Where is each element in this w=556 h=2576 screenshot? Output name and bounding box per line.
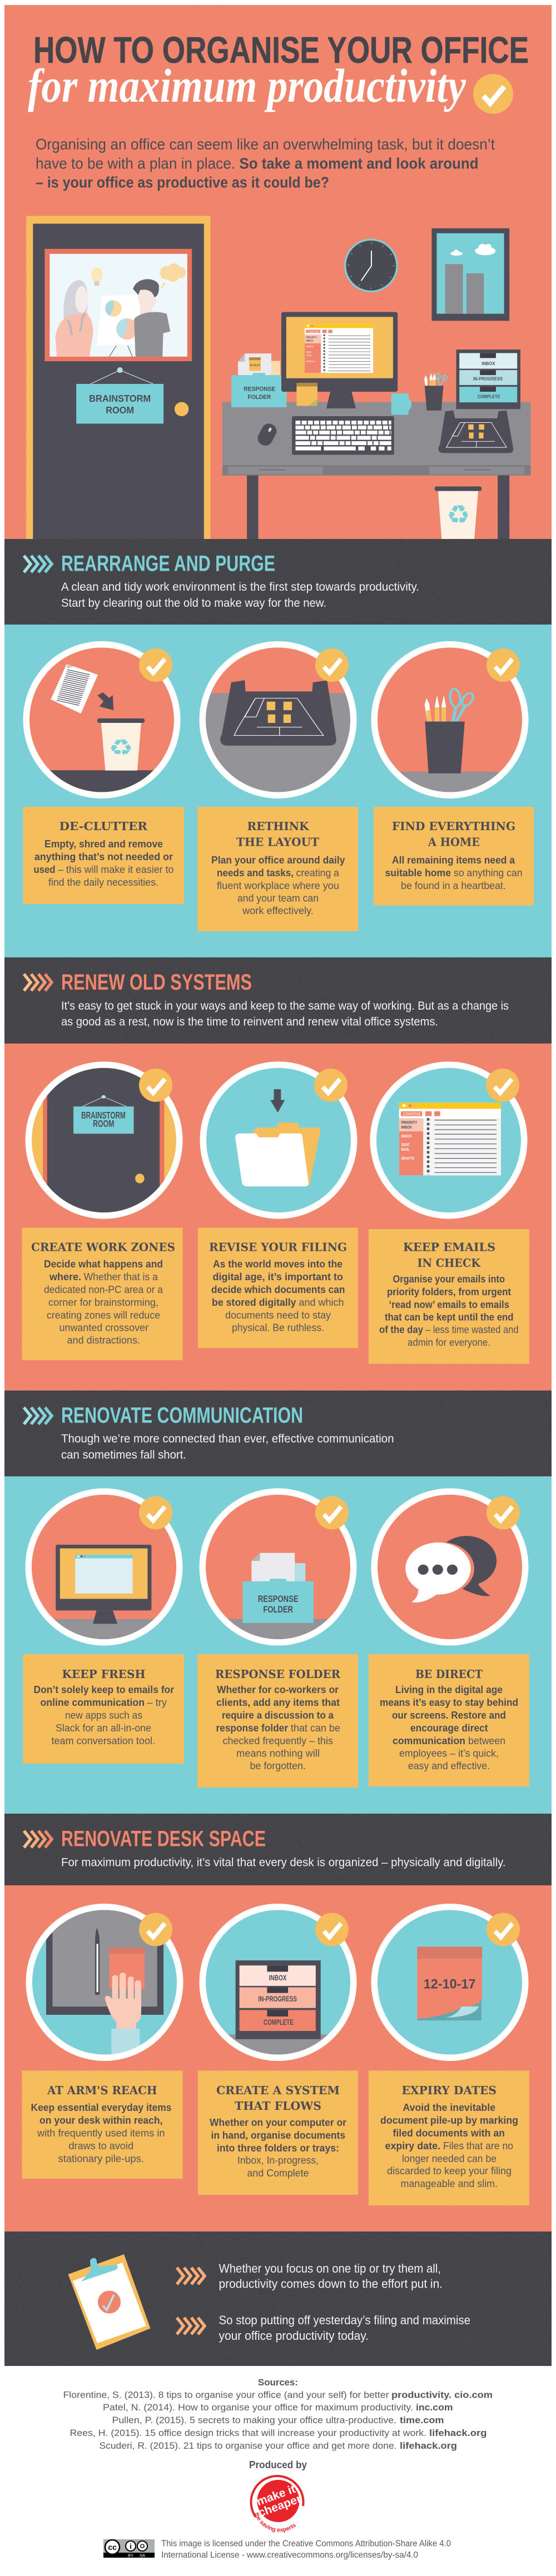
section header: renovate desk space bbox=[4, 1814, 552, 1885]
card: expiry dates: manageable and slim. bbox=[400, 2178, 498, 2189]
card: create a system that flows: into three folders or trays: bbox=[217, 2142, 339, 2154]
card: response folder: that can be bbox=[291, 1722, 340, 1734]
icon: expiry date note bbox=[365, 1902, 535, 2061]
card: be direct: encourage direct bbox=[410, 1722, 488, 1734]
card: response folder: checked frequently – this bbox=[222, 1735, 333, 1746]
closing text one: productivity comes down to the effort put in. bbox=[219, 2277, 443, 2290]
card: at arm's reach: draws to avoid bbox=[69, 2140, 133, 2151]
document trays: COMPLETE bbox=[478, 393, 500, 399]
icon: document trays bbox=[199, 1904, 357, 2061]
closing text two: So stop putting off yesterday’s filing and maximise bbox=[219, 2313, 470, 2327]
icon: work zone door: BRAINSTORM bbox=[81, 1110, 126, 1121]
card: keep emails in check: IN CHECK bbox=[417, 1256, 481, 1270]
card: create work zones: Decide what happens and bbox=[44, 1258, 163, 1270]
card: keep emails in check bbox=[369, 1229, 529, 1364]
icon: title check badge bbox=[473, 74, 513, 114]
blueprint bbox=[438, 411, 513, 453]
panel: hero bbox=[4, 5, 552, 539]
sources: Sources: bbox=[258, 2377, 298, 2388]
icon: work zone door: ROOM bbox=[93, 1119, 114, 1129]
card: create work zones bbox=[22, 1228, 182, 1360]
icon: pencil pot bbox=[371, 641, 528, 798]
card: find everything a home: so anything can bbox=[454, 867, 523, 878]
logo: make it cheaper: the saving experts bbox=[255, 2512, 296, 2533]
computer mouse bbox=[255, 421, 279, 448]
card: expiry dates: Avoid the inevitable bbox=[403, 2101, 495, 2113]
card: be direct: means it’s easy to stay behind bbox=[380, 1696, 518, 1708]
icon: clipboard bbox=[68, 2254, 150, 2350]
card: be direct: our screens. Restore and bbox=[392, 1709, 506, 1721]
keyboard bbox=[292, 416, 394, 455]
card: create work zones: dedicated non-PC area or a bbox=[44, 1284, 163, 1295]
intro text: – is your office as productive as it could be? bbox=[36, 173, 329, 191]
intro: It’s easy to get stuck in your ways and keep to the same way of working. But as a change is bbox=[61, 999, 509, 1012]
card: revise your filing: documents need to stay bbox=[225, 1309, 331, 1321]
intro: can sometimes fall short. bbox=[61, 1448, 186, 1461]
pencil cup bbox=[424, 373, 447, 411]
card: create work zones: where. bbox=[49, 1271, 81, 1282]
heading: REARRANGE AND PURGE bbox=[61, 551, 275, 576]
icon: email window: INBOX bbox=[401, 1134, 412, 1139]
sources: Pullen, P. (2015). 5 secrets to making your office ultra-productive. bbox=[112, 2415, 396, 2425]
card: response folder: RESPONSE FOLDER bbox=[215, 1668, 341, 1681]
card: keep emails in check: that can be kept until the end bbox=[385, 1311, 514, 1322]
intro text bbox=[36, 136, 495, 191]
card: keep emails in check: Organise your emails into bbox=[393, 1273, 505, 1285]
card: revise your filing: As the world moves into the bbox=[213, 1258, 342, 1270]
sources: productivity. cio.com bbox=[391, 2389, 493, 2400]
section header: renovate communication bbox=[4, 1390, 552, 1476]
sources: Patel, N. (2014). How to organise your office for maximum productivity. bbox=[103, 2402, 413, 2413]
icon: chevrons bbox=[24, 1831, 52, 1848]
icon: creative commons badge: i bbox=[130, 2542, 132, 2550]
card: de-clutter: DE-CLUTTER bbox=[59, 820, 148, 833]
intro text: have to be with a plan in place. bbox=[36, 154, 235, 172]
card: be direct: Living in the digital age bbox=[395, 1684, 503, 1695]
card: at arm's reach: with frequently used items in bbox=[37, 2127, 165, 2139]
card: create a system that flows: Whether on your computer or bbox=[210, 2116, 346, 2128]
heading: RENOVATE COMMUNICATION bbox=[61, 1404, 303, 1428]
intro: as good as a rest, now is the time to reinvent and renew vital office systems. bbox=[61, 1015, 438, 1028]
card: de-clutter bbox=[23, 807, 184, 904]
card: keep emails in check: of the day bbox=[379, 1324, 424, 1335]
card: be direct bbox=[369, 1654, 529, 1786]
card: create work zones: CREATE WORK ZONES bbox=[31, 1240, 175, 1254]
email window: DRAFTS bbox=[306, 361, 315, 363]
title line two: for maximum productivity bbox=[28, 59, 466, 112]
desk bbox=[222, 402, 530, 539]
card: rethink the layout: THE LAYOUT bbox=[236, 836, 320, 849]
card: at arm's reach: Keep essential everyday items bbox=[31, 2101, 171, 2113]
license text: International License - www.creativecommons.org/licenses/by-sa/4.0 bbox=[161, 2550, 418, 2560]
heading: RENEW OLD SYSTEMS bbox=[61, 970, 252, 995]
icon: creative commons badge: cc bbox=[108, 2543, 117, 2552]
icon: document trays: INBOX bbox=[269, 1974, 287, 1982]
email window: PRIORITY bbox=[306, 336, 317, 339]
card: keep fresh: online communication bbox=[40, 1696, 145, 1708]
card: expiry dates: EXPIRY DATES bbox=[401, 2084, 497, 2097]
icon: creative commons badge: SA bbox=[140, 2554, 145, 2558]
panel: renovate desk space bbox=[4, 1885, 552, 2231]
sources: lifehack.org bbox=[400, 2440, 457, 2451]
card: create a system that flows bbox=[198, 2070, 358, 2195]
card: at arm's reach bbox=[22, 2070, 182, 2179]
panel: closing message bbox=[4, 2231, 552, 2366]
closing text two bbox=[219, 2313, 470, 2343]
icon: chevrons bbox=[24, 556, 52, 572]
card: rethink the layout: RETHINK bbox=[247, 820, 310, 833]
card: expiry dates bbox=[369, 2070, 529, 2205]
card: revise your filing: be stored digitally bbox=[212, 1296, 296, 1308]
response folder: 12-10-17 bbox=[250, 364, 260, 367]
card: response folder: require a discussion to a bbox=[222, 1709, 334, 1721]
card: find everything a home: be found in a heartbeat. bbox=[401, 880, 506, 891]
intro: A clean and tidy work environment is the first step towards productivity. bbox=[61, 580, 419, 593]
response folder bbox=[231, 353, 287, 407]
icon: chevrons two bbox=[177, 2318, 205, 2334]
email window: COMPOSE bbox=[307, 331, 319, 333]
icon: work zone door bbox=[21, 1058, 182, 1219]
card: expiry dates: discarded to keep your filing bbox=[387, 2165, 512, 2176]
logo: make it cheaper: make it bbox=[255, 2483, 297, 2508]
sources: Florentine, S. (2013). 8 tips to organise your office (and your self) for better bbox=[63, 2389, 389, 2400]
recycling bin: ♻ bbox=[446, 500, 470, 530]
card: de-clutter: Empty, shred and remove bbox=[44, 838, 163, 850]
door window with people bbox=[44, 249, 192, 361]
wall picture bbox=[431, 228, 509, 321]
card: at arm's reach: on your desk within reach, bbox=[39, 2114, 162, 2126]
card: be direct: BE DIRECT bbox=[415, 1668, 483, 1681]
email window: MAIL bbox=[306, 355, 312, 357]
document trays bbox=[456, 350, 520, 409]
heading: RENOVATE DESK SPACE bbox=[61, 1827, 266, 1851]
sources bbox=[63, 2377, 493, 2451]
card: find everything a home: suitable home bbox=[385, 867, 451, 878]
card: rethink the layout: Plan your office around daily bbox=[211, 854, 345, 866]
intro bbox=[61, 999, 509, 1028]
icon: email window: SENT bbox=[401, 1142, 410, 1147]
icon: expiry date note: 12-10-17 bbox=[424, 1976, 476, 1991]
card: expiry dates: longer needed can be bbox=[402, 2153, 497, 2164]
card: keep fresh: Slack for an all-in-one bbox=[56, 1722, 151, 1734]
door bbox=[26, 216, 210, 539]
card: create a system that flows: CREATE A SYSTEM bbox=[216, 2084, 340, 2097]
mug bbox=[391, 393, 410, 415]
card: at arm's reach: AT ARM'S REACH bbox=[47, 2084, 157, 2097]
license text bbox=[161, 2539, 451, 2560]
intro: For maximum productivity, it’s vital that every desk is organized – physically and digitally. bbox=[61, 1856, 506, 1869]
card: find everything a home: A HOME bbox=[428, 836, 480, 849]
card: response folder: response folder bbox=[216, 1722, 288, 1734]
intro bbox=[61, 1432, 394, 1461]
card: keep emails in check: admin for everyone. bbox=[408, 1336, 490, 1348]
logo: make it cheaper: cheaper bbox=[256, 2492, 303, 2520]
card: be direct: easy and effective. bbox=[408, 1760, 490, 1771]
card: find everything a home: FIND EVERYTHING bbox=[392, 820, 515, 833]
icon: email window: INBOX bbox=[401, 1125, 412, 1130]
icon: de-clutter bin bbox=[23, 641, 180, 798]
email window: SENT bbox=[306, 351, 312, 355]
door sign bbox=[76, 367, 163, 423]
card: be direct: employees – it’s quick, bbox=[399, 1747, 499, 1759]
card: response folder bbox=[197, 1654, 358, 1788]
card: create a system that flows: Inbox, In-progress, bbox=[237, 2154, 319, 2166]
card: revise your filing: and which bbox=[299, 1296, 344, 1308]
intro text: So take a moment and look around bbox=[239, 154, 478, 172]
card: keep fresh: team conversation tool. bbox=[51, 1735, 155, 1746]
card: keep emails in check: priority folders, from urgent bbox=[387, 1286, 511, 1297]
icon: document trays: COMPLETE bbox=[264, 2018, 294, 2026]
card: response folder: be forgotten. bbox=[250, 1760, 306, 1771]
card: keep fresh: – try bbox=[147, 1696, 167, 1708]
icon: chevrons one bbox=[177, 2268, 205, 2284]
card: keep emails in check: ‘read now’ emails to emails bbox=[389, 1299, 509, 1310]
card: find everything a home: All remaining items need a bbox=[392, 854, 515, 866]
card: de-clutter: find the daily necessities. bbox=[48, 876, 158, 888]
card: response folder: means nothing will bbox=[236, 1747, 320, 1759]
card: keep fresh bbox=[23, 1654, 184, 1764]
card: keep emails in check: KEEP EMAILS bbox=[403, 1240, 495, 1254]
icon: email window: COMPOSE bbox=[403, 1111, 421, 1116]
icon: email window: MAIL bbox=[401, 1147, 410, 1152]
card: be direct: communication bbox=[393, 1735, 465, 1746]
card: create work zones: corner for brainstorming, bbox=[48, 1296, 158, 1308]
illustration: office scene bbox=[26, 216, 530, 539]
sources: Scuderi, R. (2015). 21 tips to organise your office and get more done. bbox=[99, 2440, 397, 2451]
card: create work zones: creating zones will reduce bbox=[47, 1309, 160, 1321]
intro: Though we’re more connected than ever, effective communication bbox=[61, 1432, 394, 1445]
document trays: IN-PROGRESS bbox=[473, 376, 503, 382]
card: rethink the layout: needs and tasks, bbox=[217, 867, 294, 878]
logo: make it cheaper bbox=[250, 2475, 305, 2533]
icon: creative commons badge: BY bbox=[128, 2554, 133, 2558]
card: response folder: clients, add any items that bbox=[216, 1696, 340, 1708]
icon: creative commons badge bbox=[103, 2539, 155, 2558]
icon: chevrons bbox=[24, 974, 52, 991]
card: keep emails in check: – less time wasted and bbox=[425, 1324, 518, 1335]
sources: lifehack.org bbox=[429, 2428, 487, 2438]
card: create work zones: unwanted crossover bbox=[59, 1321, 148, 1334]
card: create a system that flows: and Complete bbox=[247, 2167, 309, 2179]
card: create work zones: Whether that is a bbox=[83, 1271, 158, 1282]
door sign: BRAINSTORM bbox=[89, 393, 151, 404]
card: expiry dates: filed documents with an bbox=[393, 2127, 505, 2139]
email window bbox=[305, 324, 373, 373]
panel: renew old systems bbox=[4, 1044, 552, 1391]
card: revise your filing: REVISE YOUR FILING bbox=[209, 1240, 347, 1254]
card: keep fresh: Don’t solely keep to emails for bbox=[33, 1684, 174, 1695]
icon: filing folder bbox=[200, 1061, 357, 1219]
card: revise your filing: digital age, it’s important to bbox=[212, 1271, 343, 1282]
sticky note bbox=[296, 383, 317, 406]
card: keep fresh: KEEP FRESH bbox=[62, 1668, 146, 1681]
card: revise your filing: physical. Be ruthless. bbox=[232, 1321, 324, 1334]
card: find everything a home bbox=[374, 807, 534, 906]
intro bbox=[61, 580, 419, 610]
card: at arm's reach: stationary pile-ups. bbox=[58, 2153, 144, 2164]
icon: response folder: FOLDER bbox=[263, 1604, 293, 1614]
panel: rearrange and purge bbox=[0, 625, 552, 957]
wall clock bbox=[345, 239, 397, 291]
icon: rethink layout blueprint bbox=[199, 641, 357, 798]
icon: response folder bbox=[199, 1488, 357, 1646]
section header: renew old systems bbox=[4, 957, 552, 1044]
card: revise your filing: decide which documents can bbox=[211, 1284, 345, 1295]
card: rethink the layout: fluent workplace where you bbox=[217, 880, 339, 891]
email window: INBOX bbox=[306, 340, 314, 342]
card: create a system that flows: in hand, organise documents bbox=[211, 2129, 345, 2141]
card: rethink the layout bbox=[197, 807, 358, 931]
intro: Start by clearing out the old to make way for the new. bbox=[61, 596, 326, 610]
card: rethink the layout: work effectively. bbox=[242, 905, 314, 916]
email window: INBOX bbox=[306, 346, 314, 348]
icon: monitor bbox=[21, 1486, 182, 1650]
closing text one bbox=[219, 2262, 443, 2290]
card: revise your filing bbox=[198, 1228, 358, 1348]
card: create a system that flows: THAT FLOWS bbox=[235, 2099, 321, 2113]
recycling bin bbox=[435, 486, 481, 539]
icon: de-clutter bin: ♻ bbox=[108, 735, 133, 761]
card: rethink the layout: creating a bbox=[296, 867, 340, 878]
card: expiry dates: Files that are no bbox=[443, 2140, 513, 2151]
license text: This image is licensed under the Creative Commons Attribution-Share Alike 4.0 bbox=[161, 2539, 451, 2548]
sources: inc.com bbox=[416, 2402, 453, 2413]
sources: Rees, H. (2015). 15 office design tricks that will increase your productivity at work. bbox=[70, 2428, 426, 2438]
icon: email window: DRAFTS bbox=[401, 1156, 414, 1161]
icon: creative commons badge: O bbox=[140, 2543, 145, 2550]
intro text: Organising an office can seem like an overwhelming task, but it doesn’t bbox=[36, 136, 495, 153]
panel: renovate communication bbox=[4, 1476, 552, 1814]
icon: response folder: RESPONSE bbox=[258, 1594, 299, 1604]
response folder: FOLDER bbox=[247, 394, 271, 401]
card: keep fresh: new apps such as bbox=[65, 1709, 142, 1721]
monitor bbox=[281, 312, 398, 408]
icon: speech bubbles bbox=[371, 1488, 528, 1646]
card: be direct: between bbox=[468, 1735, 505, 1746]
closing text one: Whether you focus on one tip or try them all, bbox=[219, 2262, 441, 2275]
card: create work zones: and distractions. bbox=[67, 1334, 140, 1346]
card: de-clutter: anything that’s not needed or bbox=[34, 851, 173, 862]
card: expiry dates: document pile-up by marking bbox=[380, 2114, 518, 2126]
card: response folder: Whether for co-workers or bbox=[217, 1684, 339, 1695]
closing text two: your office productivity today. bbox=[219, 2329, 369, 2343]
sources: time.com bbox=[400, 2415, 444, 2425]
icon: chevrons bbox=[24, 1407, 52, 1424]
icon: email window: PRIORITY bbox=[401, 1120, 417, 1125]
icon: document trays: IN-PROGRESS bbox=[258, 1995, 297, 2004]
card: de-clutter: – this will make it easier to bbox=[58, 863, 173, 875]
section header: rearrange and purge bbox=[4, 539, 552, 625]
door sign: ROOM bbox=[106, 405, 134, 416]
icon: email window bbox=[365, 1058, 535, 1219]
response folder: RESPONSE bbox=[244, 386, 275, 393]
card: de-clutter: used bbox=[33, 863, 56, 875]
icon: hand reaching bbox=[21, 1902, 183, 2061]
card: rethink the layout: and your team can bbox=[237, 892, 319, 903]
document trays: INBOX bbox=[481, 361, 495, 366]
card: expiry dates: expiry date. bbox=[385, 2140, 440, 2151]
produced by: Produced by bbox=[249, 2459, 307, 2470]
